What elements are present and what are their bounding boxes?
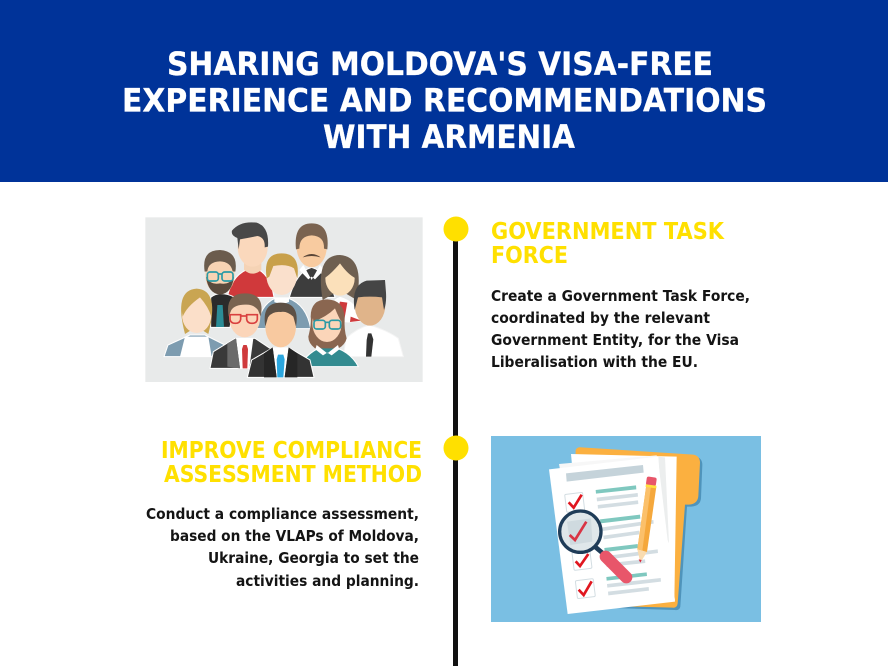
timeline marker 1 [444, 216, 468, 242]
text block: government task force: Create a Government Task Force, [491, 287, 750, 305]
text block: government task force: coordinated by the relevant [491, 309, 710, 327]
person: blond man in slate jacket [257, 253, 311, 329]
illustration: checklist with folder [491, 436, 761, 622]
illustration: group of people [145, 217, 423, 382]
text block: government task force: Government Entity, for the Visa [491, 331, 739, 349]
pencil [637, 476, 657, 563]
checkboxes with red ticks [565, 492, 595, 599]
text block: government task force: Liberalisation with the EU. [491, 353, 698, 371]
person: front man with blue tie [247, 303, 314, 377]
heading: improve compliance assessment method [161, 438, 422, 488]
text block: compliance assessment: Ukraine, Georgia to set the [208, 549, 419, 567]
title: SHARING MOLDOVA'S VISA-FREE [167, 45, 713, 83]
heading: improve compliance assessment method: IMPROVE COMPLIANCE [161, 438, 422, 464]
timeline marker 2 [444, 436, 468, 460]
person: blonde woman in slate jacket [164, 289, 225, 357]
header banner [0, 0, 888, 182]
magnifying glass [560, 511, 626, 577]
person: woman with teal glasses [300, 299, 358, 367]
title [122, 45, 767, 156]
heading: government task force: FORCE [491, 243, 568, 269]
text block: compliance assessment: based on the VLAPs of Moldova, [170, 527, 419, 545]
text block: government task force [491, 287, 750, 371]
checklist lines [566, 465, 661, 595]
person: dark-haired man in white shirt [343, 280, 403, 357]
person: bearded man with teal glasses [204, 250, 236, 327]
person: brown-haired woman [321, 255, 362, 322]
folder [572, 447, 702, 610]
text block: compliance assessment: activities and planning. [236, 572, 419, 590]
heading: improve compliance assessment method: ASSESSMENT METHOD [164, 462, 422, 488]
heading: government task force: GOVERNMENT TASK [491, 219, 725, 245]
person: back right with moustache [289, 223, 335, 297]
text block: compliance assessment [146, 505, 419, 590]
text block: compliance assessment: Conduct a compliance assessment, [146, 505, 419, 523]
heading: government task force [491, 219, 725, 269]
title: WITH ARMENIA [323, 118, 575, 156]
person: back left in red shirt [227, 222, 274, 297]
timeline line [453, 236, 458, 666]
person: man with red glasses [210, 293, 280, 368]
title: EXPERIENCE AND RECOMMENDATIONS [122, 82, 767, 120]
paper stack [549, 454, 677, 614]
